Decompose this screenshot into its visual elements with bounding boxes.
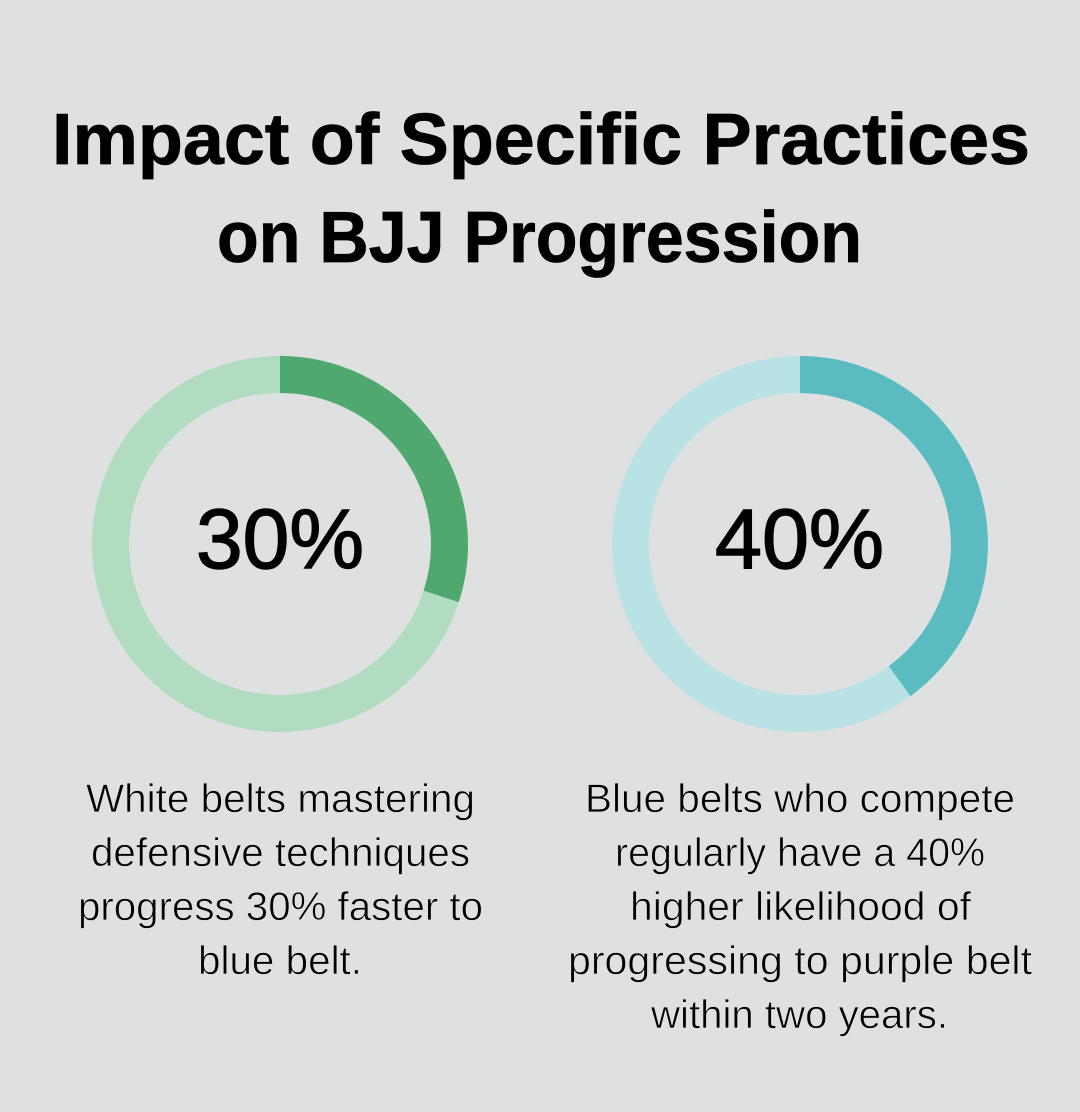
panel: white belts 30%: [78, 374, 483, 983]
title: on BJJ Progression: [217, 198, 862, 278]
description: blue belts: regularly have a 40%: [615, 831, 985, 875]
donut chart: 30%: [110, 374, 450, 714]
description: blue belts: [568, 777, 1032, 1037]
title: Impact of Specific Practices: [52, 100, 1030, 180]
description: white belts: progress 30% faster to: [78, 885, 483, 929]
donut chart: 40%: [630, 374, 970, 714]
title: [52, 100, 1030, 278]
description: white belts: defensive techniques: [91, 831, 470, 875]
value: 30%: 30%: [196, 492, 364, 586]
description: blue belts: progressing to purple belt: [568, 939, 1032, 983]
description: blue belts: within two years.: [650, 993, 948, 1037]
value: 40%: 40%: [715, 492, 884, 586]
description: blue belts: higher likelihood of: [630, 885, 972, 929]
description: blue belts: Blue belts who compete: [585, 777, 1015, 821]
panel: blue belts 40%: [568, 374, 1032, 1037]
description: white belts: White belts mastering: [86, 777, 475, 821]
description: white belts: blue belt.: [198, 939, 362, 983]
description: white belts: [78, 777, 483, 983]
